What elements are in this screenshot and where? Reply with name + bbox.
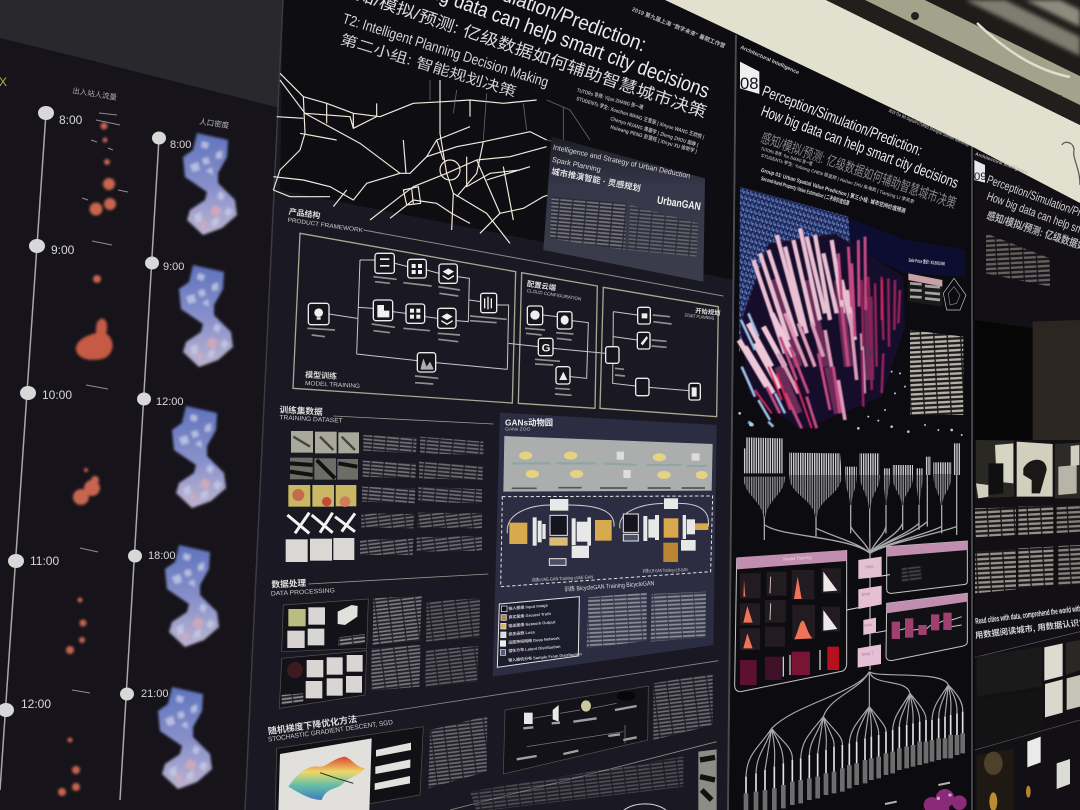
population density maps [158, 133, 237, 789]
poster 08 title line 1: Perception/Simulation/Prediction: [760, 83, 924, 160]
intro subheading: Spark Planning [551, 155, 602, 174]
tutors: Huiwang PENG 彭慧旺 | Xinyu XU 徐昕宇 | [609, 123, 699, 155]
pale pink spikes [739, 228, 900, 428]
heading: data processing: 数据处理 [271, 577, 307, 590]
wall wire [1062, 142, 1080, 185]
side text block [910, 330, 963, 415]
icon captions [307, 277, 507, 384]
GAN notes [587, 592, 706, 648]
timeline 2: 8:00 [170, 139, 191, 151]
road network map [273, 73, 563, 243]
legend: 输入图像 Input Image [508, 602, 549, 611]
step labels: Step [861, 591, 871, 597]
radar chart [943, 278, 966, 310]
timeline 2: 12:00 [156, 396, 184, 408]
icon glyph details [314, 258, 492, 370]
panel: GANs zoo: GANs ZOO [505, 427, 531, 433]
central poster lower block (zoom coordinates) [267, 404, 718, 810]
dataset image grid [286, 431, 359, 562]
timeline 1: 12:00 [21, 697, 51, 711]
G icon letter: G [542, 343, 551, 355]
heading: inbound outbound flow: 出入站人流量 [72, 85, 118, 102]
data visualization: spikes field (local zoom coordinates) [738, 187, 965, 436]
output tree [746, 672, 963, 777]
wall [665, 0, 1080, 203]
fan chart flows [743, 473, 952, 517]
panel: SGD surface [275, 727, 423, 810]
side info card [908, 257, 966, 310]
panel: UrbanGAN intro [543, 137, 705, 282]
legend: 损失函数 Loss [508, 628, 536, 637]
panel: model training results: Model Training [783, 555, 812, 562]
subtitle: T2: T2: Intelligent Planning Decision Making [340, 11, 550, 91]
heading: product framework [287, 206, 363, 234]
heading: data processing: DATA PROCESSING [271, 587, 335, 598]
output stems [746, 712, 963, 793]
frame: cloud configuration: 配置云端 [526, 279, 557, 293]
terrain surface [288, 757, 365, 800]
heading: product framework: PRODUCT FRAMEWORK [287, 218, 363, 234]
poster 09 header block: 09 [974, 171, 987, 183]
panel: top right results [847, 541, 967, 610]
poster 09 text lines [986, 233, 1050, 287]
heading: training dataset: 训练集数据 [279, 404, 323, 417]
left poster top textured band [0, 0, 300, 113]
intro paragraph left [550, 197, 627, 250]
panel: processing step 1 [282, 599, 368, 652]
frame: start planning: 开始规划 [695, 306, 721, 317]
label: model training english: MODEL TRAINING [305, 381, 360, 390]
caption: training BicycleGAN: 训练 BicycleGAN Training BicycleGAN [564, 578, 655, 593]
top right workshop caption: 2019 第九届上海 "数字未来" 暑期工作营 [631, 5, 727, 50]
timeline 1 [0, 106, 83, 790]
poster 08 tutors lines: Second-hand Property Value Estimation | 二手房价值估算 [760, 174, 851, 207]
pipeline step boxes [858, 557, 882, 668]
dataset descriptions [360, 435, 483, 555]
panel: poster 09 [975, 148, 1080, 810]
badge 08: 08 [740, 74, 759, 93]
blue dashes field [739, 187, 850, 353]
timeline 1: 9:00 [51, 243, 75, 257]
diagram captions: 训练cVAE-GAN Training cVAE-GAN [531, 573, 593, 584]
small station labels [72, 113, 128, 693]
circle arc [623, 804, 667, 810]
step labels: Data [864, 622, 873, 628]
panel: left poster timelines [0, 75, 237, 800]
timeline 2: 18:00 [148, 550, 176, 562]
tutors: STUDENTs 学生: Xuechen WANG 王雪辰 | Xinyue WANG 王欣悦 | [575, 94, 706, 141]
poster 08 title line 2: How big data can help smart city decisions [759, 103, 961, 192]
step labels: Step [865, 564, 875, 569]
small bottom label [885, 783, 950, 804]
scattered data dots [738, 371, 963, 436]
frame: start planning: START PLANNING [684, 313, 715, 321]
timeline 1: 11:00 [30, 554, 59, 568]
intro Chinese heading: 城市推演智能 · 灵感规划 [551, 166, 642, 193]
timeline 2 [120, 132, 191, 800]
connector lines [329, 260, 509, 369]
timeline 2: 21:00 [141, 688, 169, 700]
brown panel [1033, 320, 1080, 440]
timeline 2: 9:00 [163, 261, 184, 273]
tutors [575, 86, 706, 155]
panel: GANs zoo: 训练cLR-GAN Training cLR-GAN [642, 566, 688, 575]
heading: product framework: 产品结构 [288, 206, 321, 220]
badge 08 [740, 62, 759, 94]
fan chart blocks [743, 437, 960, 475]
cable [977, 23, 1070, 77]
poster top dark zone [280, 0, 736, 280]
step labels [861, 564, 875, 657]
panel: network diagram results [876, 593, 967, 661]
panel: model training results [735, 550, 847, 692]
poster 09 paragraphs [975, 505, 1080, 593]
poster 08 tutors lines: TUTORs 导师: Yun ZHANG 张一珺 [760, 145, 813, 168]
panel: GANs zoo [493, 413, 717, 677]
lower description [470, 757, 683, 810]
output tails [746, 733, 963, 810]
panel: central poster [245, 0, 736, 810]
heading: data processing [271, 574, 488, 598]
photo strip [698, 749, 717, 810]
timeline 1: 8:00 [59, 113, 83, 127]
station flow blobs [58, 122, 116, 796]
frame: cloud configuration [509, 273, 606, 408]
legend: 潜在分布 Latent Distribution [508, 643, 561, 653]
UrbanGAN logo text: UrbanGAN [656, 194, 702, 213]
heading: SGD: STOCHASTIC GRADIENT DESCENT, SGD [268, 719, 394, 744]
intro paragraph right [628, 205, 698, 257]
subtitle: group 2: 第二小组: 智能规划决策 [338, 31, 518, 100]
badge 09 [974, 160, 985, 183]
processing descriptions [371, 596, 480, 691]
poster 09 header block [974, 151, 1080, 440]
poster 08 top block (zoom coordinates) [738, 45, 1080, 440]
ceiling with vents [826, 0, 1080, 185]
faded roads on upper right [430, 80, 590, 187]
tutors: Chenyu HUANG 黄晨宇 | Zheng ZHOU 周峥 | [609, 114, 700, 149]
step labels: Step 7 [861, 650, 875, 657]
BicycleGAN dashed training diagram [501, 496, 713, 587]
legend: 深度神经网络 Deep Network [508, 634, 561, 645]
heading: population density: 人口密度 [199, 116, 230, 130]
pink data cluster at bottom [924, 789, 967, 810]
workshop caption: 2019 The 9th DigitalFUTURES Shanghai Summer Workshop [888, 108, 970, 147]
poster 08 Chinese title: 感知/模拟/预测: 亿级数据如何辅助智慧城市决策 [759, 129, 958, 211]
central poster top block (zoom coordinates) [273, 0, 727, 417]
poster 09 photos [976, 440, 1080, 498]
poster 09 header block: Architectural Intelligence [975, 151, 1029, 175]
poster 08 tutors lines: Group 03: Urban Spatial Value Prediction | 第三小组: 城市空间价值预测 [760, 166, 907, 215]
frame: cloud configuration: CLOUD CONFIGURATION [527, 288, 582, 302]
dark base under spikes [740, 233, 905, 430]
timeline 1: 10:00 [42, 388, 72, 402]
heading: SGD: 随机梯度下降优化方法 [267, 713, 358, 736]
legend: 真实图像 Ground Truth [508, 610, 552, 620]
legend: 输出图像 Network Output [508, 618, 556, 628]
label: model training: 模型训练 [305, 369, 337, 381]
zoo gray diagram strip [503, 436, 713, 492]
frame: start planning [600, 287, 721, 417]
navy right field [845, 217, 965, 277]
poster 09 lower images [975, 632, 1080, 810]
side info card: Sale Price 售价: ¥3,500,000 [908, 257, 945, 267]
training icons [308, 253, 497, 372]
panel: poster 08 [729, 33, 975, 810]
poster 09 slogan [974, 603, 1080, 640]
poster 08 & 09 lower block (zoom coordinates) [735, 437, 1080, 810]
poster 08 header caption: Architectural Intelligence [739, 45, 800, 76]
heading: training dataset [279, 404, 493, 425]
legend [497, 597, 582, 667]
dark panel [975, 320, 1033, 440]
heading: training dataset: TRAINING DATASET [279, 414, 343, 425]
text column right [653, 673, 713, 740]
panel: pipeline diagram [503, 686, 648, 774]
frame: model training [293, 233, 516, 403]
panel: GANs zoo: GANs动物园 [505, 417, 553, 427]
legend: 输入随机分布 Sample From Distribution [508, 650, 582, 663]
tutors: TUTORs 导师: Yijun ZHANG 张一珺 [576, 86, 645, 111]
heading: SGD [267, 661, 718, 744]
fan stems and merge curves [764, 475, 957, 670]
poster 08 tutors lines: STUDENTs 学生: Yubang CHEN 陈昱邦 | Hailan ZHU 朱海岚 | Tianjing LI 李天京 [760, 152, 915, 205]
SGD description [428, 716, 487, 788]
background: dark left poster [0, 0, 300, 810]
panel: processing step 2 [279, 651, 367, 708]
intro heading: Intelligence and Strategy of Urban Deduction [552, 142, 691, 180]
